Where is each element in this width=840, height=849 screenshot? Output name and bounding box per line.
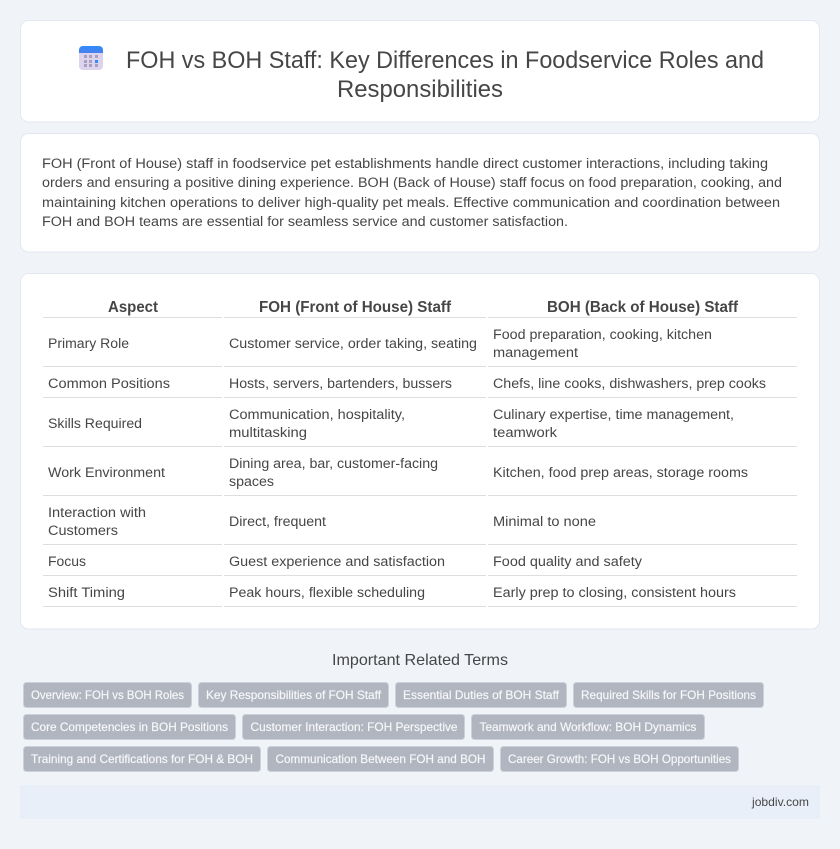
table row: shift timing: Early prep to closing, consistent hours [493,585,736,601]
table row: interaction with customers: Interaction with [48,505,146,521]
panel: comparison table [20,274,820,629]
table row: work environment: Dining area, bar, customer-facing [229,456,438,472]
table row: interaction with customers: Minimal to none [493,514,596,530]
table row: shift timing: Shift Timing [48,585,125,601]
heading: important related terms: Important Related Terms [332,652,508,669]
tag [396,682,566,708]
tag: Required Skills for FOH Positions [581,688,756,702]
footer [20,785,820,819]
table row: interaction with customers [48,505,596,539]
tag: Communication Between FOH and BOH [276,752,486,766]
table row: common positions: Hosts, servers, bartenders, bussers [229,376,452,392]
table row: shift timing [48,585,736,601]
tag [24,682,192,708]
table row: interaction with customers: Customers [48,523,118,539]
text block: introduction paragraph: FOH (Front of House) staff in foodservice pet establishments handle direct customer interactions, including taking [42,156,768,172]
table row: skills required: multitasking [229,425,307,441]
panel: introduction [20,134,820,252]
panel: header [20,20,820,122]
table row: common positions: Common Positions [48,376,170,392]
icon: calendar [79,46,103,70]
table row: primary role: Food preparation, cooking, kitchen [493,327,712,343]
table header row: Aspect [108,299,158,316]
table header row: FOH (Front of House) Staff [259,299,452,316]
table header row: BOH (Back of House) Staff [547,299,739,316]
tag [24,746,260,772]
tag: Career Growth: FOH vs BOH Opportunities [508,752,731,766]
table row: skills required: teamwork [493,425,558,441]
tag: Core Competencies in BOH Positions [31,720,228,734]
table row: primary role: Customer service, order taking, seating [229,336,477,352]
tag: Key Responsibilities of FOH Staff [206,688,382,702]
table row: work environment: spaces [229,474,274,490]
table row: primary role: management [493,345,578,361]
tag: Customer Interaction: FOH Perspective [250,720,458,734]
table row: skills required: Culinary expertise, time management, [493,407,734,423]
tag: Teamwork and Workflow: BOH Dynamics [480,720,696,734]
title: Responsibilities [337,77,503,103]
table row: work environment: Work Environment [48,465,165,481]
table header row [108,299,739,316]
table row: primary role: Primary Role [48,336,129,352]
table row: interaction with customers: Direct, frequent [229,514,326,530]
tag: Training and Certifications for FOH & BOH [31,752,253,766]
tag [24,714,236,740]
table row: work environment: Kitchen, food prep areas, storage rooms [493,465,748,481]
title [126,48,764,103]
table row: skills required: Skills Required [48,416,142,432]
table row: focus: Guest experience and satisfaction [229,554,445,570]
table row: focus: Food quality and safety [493,554,643,570]
title: FOH vs BOH Staff: Key Differences in Foodservice Roles and [126,48,764,74]
tag [500,746,738,772]
footer: jobdiv.com [751,795,809,809]
tag [574,682,764,708]
table row: primary role [48,327,712,361]
related term tags [24,682,764,772]
table row: shift timing: Peak hours, flexible scheduling [229,585,425,601]
table row: focus: Focus [48,554,86,570]
table row: work environment [48,456,748,490]
table row: skills required [48,407,734,441]
tag: Essential Duties of BOH Staff [403,688,560,702]
table row: common positions: Chefs, line cooks, dishwashers, prep cooks [493,376,766,392]
tag [268,746,494,772]
tag: Overview: FOH vs BOH Roles [31,688,184,702]
tag [242,714,464,740]
tag [472,714,704,740]
table row: common positions [48,376,766,392]
text block: introduction paragraph: orders and ensuring a positive dining experience. BOH (Back of House) staff focus on food preparation, cooking, and [42,175,782,191]
text block: introduction paragraph: FOH and BOH teams are essential for seamless service and customer satisfaction. [42,214,568,230]
table row: skills required: Communication, hospitality, [229,407,405,423]
tag [198,682,388,708]
text block: introduction paragraph [42,156,782,230]
table row: focus [48,554,643,570]
text block: introduction paragraph: maintaining kitchen operations to deliver high-quality pet meals. Effective communication and coordination between [42,195,780,211]
